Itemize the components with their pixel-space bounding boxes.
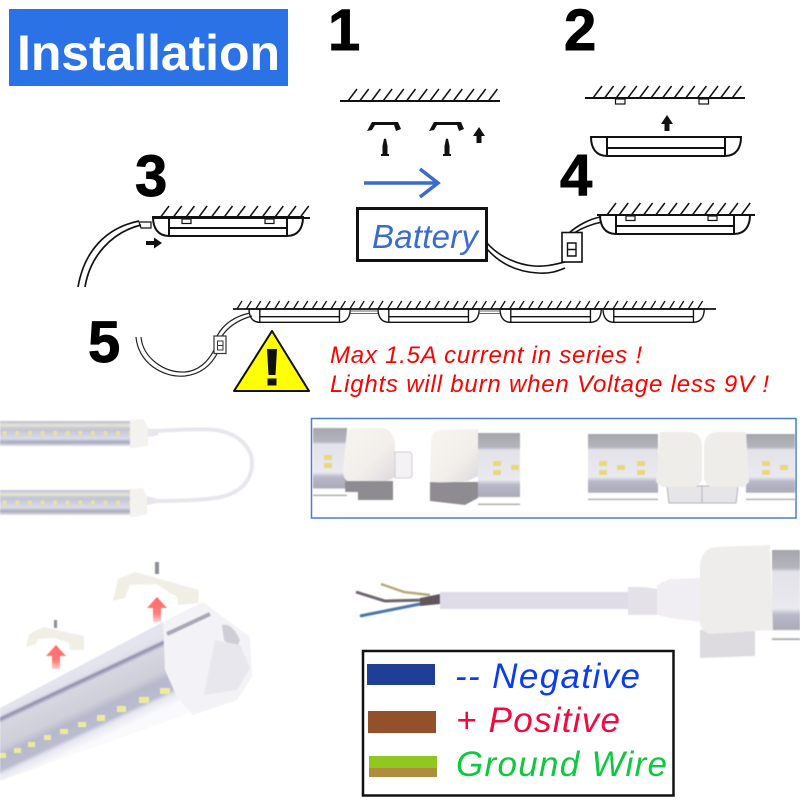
wire: gray [356,592,425,601]
end cap [700,545,773,634]
blue arrow [364,169,438,197]
label: negative: -- Negative [455,657,640,696]
cable sheath [440,592,628,609]
icon: warning triangle [234,331,309,391]
label: ground wire: Ground Wire [456,745,667,784]
step number 5: 5 [88,310,120,375]
diagram: step 5 four lamps in series [136,301,716,376]
tube body [0,622,190,781]
photo: open tube end with plug [313,428,412,500]
photo: tube with mounting clips [0,562,252,781]
step number 4: 4 [560,143,592,208]
diagram: step 1 ceiling, clips and screws [340,89,500,155]
LED row [0,688,170,758]
step number 3: 3 [135,144,167,209]
photo: stripped power cable and tube end [356,545,800,658]
neck [657,578,702,622]
mounting clip small [26,627,84,650]
cable tube section [772,550,800,640]
warning text: Lights will burn when Voltage less 9V ! [330,371,769,398]
legend [363,651,674,796]
photo: socket tube end [430,429,520,505]
wire: blue [360,603,425,616]
red arrow large [147,597,167,622]
photo: two tubes joined [588,432,795,503]
diagram: step 2 ceiling and lamp [585,86,745,156]
title banner: Installation [17,25,280,81]
photo: two tubes linked by a cable [0,419,252,517]
warning text [330,342,769,398]
swatch: positive [368,711,436,733]
wire: gold [381,584,430,595]
clip [700,630,755,658]
mounting clip large [113,572,199,605]
swatch: negative [367,664,435,685]
battery box [358,208,486,260]
panel: tube end connector close-ups [312,418,796,518]
diagram: step 3 lamp with cable [78,206,310,287]
swatch: ground wire [369,756,437,777]
diagram: step 4 lamp with wiring from battery [487,203,755,273]
cable stub [420,594,440,606]
screw small [54,620,57,628]
battery box: Battery [372,218,480,255]
screw large [155,562,159,574]
title banner [9,9,288,86]
tube end cap [163,602,252,715]
red arrow small [46,645,66,669]
strain relief [628,587,657,615]
warning text: Max 1.5A current in series ! [330,342,642,369]
label: positive: + Positive [456,701,620,740]
